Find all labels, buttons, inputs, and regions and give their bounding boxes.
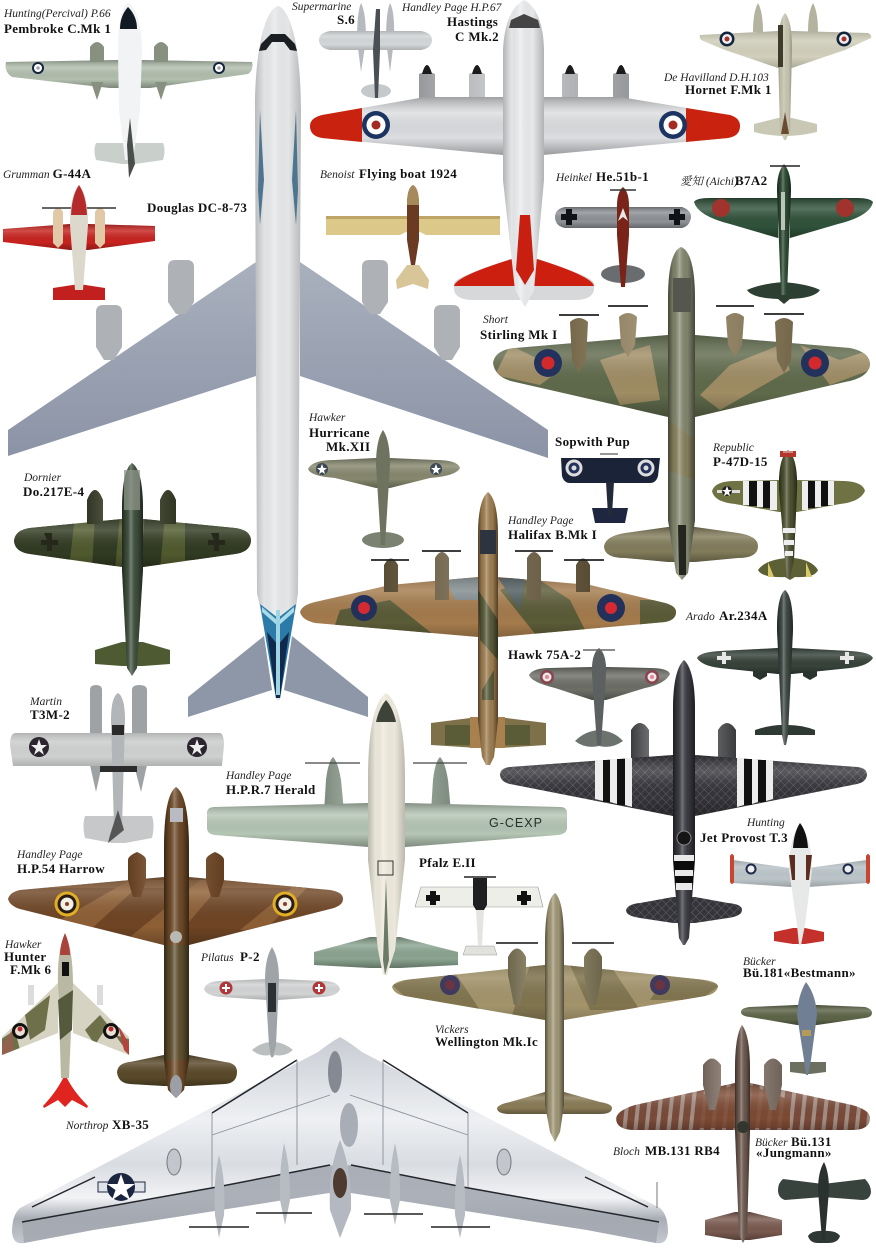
label: Bü.131: Bücker [755,1137,788,1149]
Halifax roundels [351,594,625,622]
Hornet wing [700,31,871,68]
Pup wing [561,458,660,483]
label: Bü.131: Bü.131 [791,1134,832,1149]
label: XB-35: Northrop [65,1120,109,1132]
label: MB.131: Bloch [613,1146,640,1158]
He.51 tail [601,265,645,283]
Jet Provost wing [733,860,867,887]
Harrow wing [8,877,343,945]
S.6 floats [357,3,394,72]
Wellington roundels [440,975,670,995]
label: Jet Provost: Jet Provost T.3 [700,830,788,845]
label: MB.131: MB.131 RB4 [645,1143,720,1158]
label: Hastings: Handley Page H.P.67 [401,2,503,14]
aircraft: Douglas DC-8-73 [8,6,548,717]
B7A2 fuselage [777,164,791,295]
Hastings red wingtips [310,108,740,142]
aircraft: Sopwith Pup [561,454,660,523]
Hurricane fuselage [376,430,390,545]
Jet Provost tip tanks [730,854,870,884]
Pfalz fuselage [473,878,487,910]
Hastings wing [310,97,740,155]
label: Hastings: C Mk.2 [455,29,499,44]
B7A2 wing [694,198,873,238]
label: Hornet: De Havilland D.H.103 [663,72,769,84]
He.51 upper wing [555,207,691,228]
aircraft: Benoist flying boat [326,185,500,289]
Stirling camouflage wing [493,335,870,417]
Hornet tail [754,118,817,136]
Ar.234 crosses [717,652,854,664]
label: S.6: S.6 [337,12,355,27]
label: Hastings: Hastings [447,14,498,29]
P-47 wing [712,480,865,512]
S.6 fuselage [373,9,380,98]
Pembroke roundels [32,62,225,74]
Pup propeller [600,453,618,455]
Harrow fuselage [164,787,189,1098]
Hunter wings [2,983,129,1055]
aircraft: Martin T3M-2 [10,685,224,843]
aircraft: Heinkel He.51b-1 [555,187,691,287]
Bü.131 fuselage [818,1162,829,1240]
aircraft: Hawk 75A-2 [529,648,670,747]
P-2 tail [252,1042,293,1058]
Stirling fuselage [668,247,695,580]
Stirling engines [570,313,793,373]
Hawk fuselage [592,648,606,745]
aircraft: Bücker Bü.131 [778,1162,871,1243]
P-2 wing [204,979,340,1000]
Hunter roundels [12,1023,119,1039]
Pembroke wing [6,60,252,88]
Hornet engines [753,3,818,32]
Ar.234 wing [697,648,873,674]
aircraft: Handley Page Herald [207,693,567,975]
S.6 tail [361,84,391,98]
label: Hunter: Hawker [4,939,42,951]
Wellington engines [508,948,602,1005]
Hurricane tail [362,532,404,548]
Hunter tail [43,1074,88,1108]
label: Hawk: Hawk 75A-2 [508,647,581,662]
label: B7A2: B7A2 [735,173,767,188]
bomber wing [500,755,867,816]
P-47 fuselage [779,450,797,578]
Wellington camouflage wing [392,965,718,1020]
label: Herald: H.P.R.7 Herald [226,782,316,797]
Bü.131 wing [778,1179,871,1200]
Herald fuselage [368,693,405,975]
Hornet roundels [720,32,852,46]
T3M wing [10,733,224,766]
Do.217 fuselage [122,463,143,676]
Herald engines [324,757,451,812]
label: Hornet: Hornet F.Mk 1 [685,82,772,97]
Pup roundels [566,460,654,476]
aircraft: Vickers Wellington Mk.Ic [385,893,720,1142]
aircraft: Supermarine S.6 [319,3,432,98]
aircraft: Hawker Hunter F.Mk 6 [0,933,135,1108]
Pfalz tail [463,946,497,955]
XB-35 antenna [656,1182,658,1208]
label: Bü.131: «Jungmann» [756,1145,832,1160]
XB-35 outboard nacelles [214,1143,465,1238]
Pup tail [592,508,628,523]
MB.131 tail [705,1212,782,1240]
Halifax engines [384,552,590,600]
B7A2 hinomaru [712,199,730,217]
G-44A engines [53,208,105,248]
G-44A wing [3,224,155,250]
label: Benoist: Benoist [320,169,355,181]
Hornet fuselage [778,13,792,140]
label: G-44A: G-44A [53,166,91,181]
label: Stirling: Short [483,314,509,326]
label: Pfalz: Pfalz E.II [419,855,476,870]
aircraft: Hawker Hurricane Mk.XII [308,430,460,548]
label: XB-35: XB-35 [112,1117,149,1132]
Bü.181 fuselage [797,982,817,1075]
aircraft: Short Stirling Mk I [490,247,875,580]
Hastings fuselage [503,0,544,307]
Do.217 crosses [41,533,225,551]
MB.131 wing [616,1083,870,1130]
Herald wing [207,803,567,847]
Harrow tail [117,1055,237,1086]
Jet Provost roundels [746,864,854,874]
label: DC-8: Douglas DC-8-73 [147,200,247,215]
label: T3M: Martin [29,696,62,708]
label: He.51: He.51b-1 [596,169,649,184]
aircraft: Bücker Bü.181 [741,982,872,1075]
DC-8 tailplane [188,636,368,717]
T3M star markings [29,737,207,757]
Hastings engines [419,72,629,102]
Do.217 engines [87,490,176,524]
label: Jet Provost: Hunting [746,817,785,829]
Ar.234 fuselage [777,590,793,745]
Bü.181 tail [790,1062,826,1074]
label: Pilatus: Pilatus [200,952,234,964]
Wellington tail [497,1092,612,1114]
aircraft: Handley Page H.P.54 Harrow [5,787,350,1098]
label: B7A2: 愛知 (Aichi) [680,175,738,188]
label: Wellington: Wellington Mk.Ic [435,1034,538,1049]
Pfalz crosses [426,891,531,905]
XB-35 flying wing [12,1037,668,1243]
G-44A fuselage [70,185,88,290]
XB-35 trailing-edge flaps [22,1165,659,1243]
label: Pembroke C.Mk 1: Pembroke C.Mk 1 [4,21,111,36]
aircraft: Bloch MB.131 RB4 [612,1025,874,1243]
Harrow roundels [54,892,298,916]
P-47 star [717,486,740,496]
aircraft: Pfalz E.II [415,877,543,955]
label: Ar.234: Arado [685,611,715,623]
Pembroke engines [90,42,168,100]
Stirling roundels [534,349,829,377]
Hawk roundels [540,670,659,684]
label: Hunter: F.Mk 6 [10,962,51,977]
DC-8 engines [96,260,460,360]
Pembroke tail [94,143,164,164]
P-47 tail [758,558,818,580]
Do.217 tail [95,642,170,666]
Hurricane star markings [316,463,442,475]
label: Bü.181: Bücker [743,956,776,968]
aircraft: Aichi B7A2 [694,164,873,304]
label: Harrow: Handley Page [16,849,82,861]
Hastings tail [454,258,594,300]
label: He.51: Heinkel [555,172,592,184]
Hunter fuselage [58,933,73,1078]
Hawk tail [575,730,623,747]
aircraft: Northrop XB-35 [12,1037,668,1243]
aircraft: De Havilland Hornet [700,3,871,140]
XB-35 blisters [167,1149,511,1175]
aircraft: Pembroke C.Mk 1 [6,3,252,178]
label: Benoist: Flying boat 1924 [359,166,457,181]
aircraft: Grumman G-44A [3,185,155,300]
Benoist hull [407,185,419,265]
label: Hurricane: Hawker [308,412,346,424]
Halifax camouflage wing [300,577,676,637]
T3M fuselage [111,693,125,828]
label: Halifax: Halifax B.Mk I [508,527,597,542]
label: Hurricane: Mk.XII [326,439,370,454]
bomber tail [626,897,742,923]
label: Halifax: Handley Page [507,515,573,527]
label: Hurricane: Hurricane [309,425,370,440]
XB-35 national marking [98,1173,145,1201]
label: Sopwith Pup: Sopwith Pup [555,434,630,449]
P-2 fuselage [265,947,279,1057]
Jet Provost fuselage [789,823,812,945]
Pup fuselage [606,482,614,515]
bomber wing stripes [595,758,773,807]
Pfalz wing [415,887,543,907]
Stirling tail [604,527,758,562]
label: Herald: Handley Page [225,770,291,782]
label: P-47: P-47D-15 [713,454,768,469]
Wellington fuselage [545,893,564,1142]
Bü.131 tail [808,1231,840,1243]
label: S.6: Supermarine [292,1,351,13]
label: Pilatus: P-2 [240,949,260,964]
P-2 Swiss markings [220,982,326,994]
bomber fuselage [673,660,695,945]
Hunter drop tanks [28,985,103,1005]
S.6 wing [319,31,432,50]
aircraft: Handley Page Halifax B.Mk I [295,492,680,765]
He.51 crosses [561,209,685,225]
label: Bü.181: Bü.181«Bestmann» [743,965,856,980]
label: Do.217: Do.217E-4 [23,484,84,499]
label: Hunter: Hunter [4,949,47,964]
Halifax tail [431,717,546,748]
aircraft: Dornier Do.217E-4 [10,463,255,676]
label: Ar.234: Ar.234A [719,608,768,623]
bomber engines [631,723,736,770]
label: G-44A: Grumman [3,169,50,181]
Herald registration: G-CEXP [489,816,543,830]
He.51 fuselage [617,187,629,287]
label: P-47: Republic [712,442,754,454]
Hastings roundels [362,111,687,139]
Bü.181 wing [741,1005,872,1025]
DC-8 wings [8,262,548,458]
Jet Provost tail [774,928,824,944]
aircraft: Arado Ar.234A [697,590,873,745]
Ar.234 tail [755,725,815,735]
label: Pembroke C.Mk 1: Hunting(Percival) P.66 [3,8,111,20]
Halifax fuselage [478,492,498,765]
Do.217 wing [14,519,251,567]
P-47 invasion stripes [743,481,834,510]
Benoist wing [326,216,500,235]
DC-8 fuselage [255,6,301,700]
Herald tail [314,937,458,968]
XB-35 central nacelle [330,1140,351,1238]
Hurricane wing [308,458,460,488]
MB.131 engines [703,1058,782,1110]
label: Wellington: Vickers [435,1024,469,1036]
label: Harrow: H.P.54 Harrow [17,861,105,876]
B7A2 tail [747,282,820,304]
aircraft: Handley Page Hastings [310,0,740,307]
G-44A tail [53,284,105,300]
aircraft: Pilatus P-2 [204,947,340,1058]
label: Do.217: Dornier [23,472,62,484]
MB.131 fuselage [735,1025,750,1243]
Ar.234 nacelles [753,668,817,680]
label: Stirling: Stirling Mk I [480,327,558,342]
Benoist tail [396,265,429,289]
Harrow engines [128,852,224,897]
Hawk wing [529,667,670,700]
aircraft: invasion-striped bomber [500,660,867,945]
T3M floats [90,685,147,792]
aircraft: Jet Provost T.3 [730,823,870,945]
T3M lower tail [84,816,154,843]
label: T3M: T3M-2 [30,707,70,722]
aircraft: Republic P-47D-15 [712,450,865,580]
Pembroke fuselage [118,3,142,160]
